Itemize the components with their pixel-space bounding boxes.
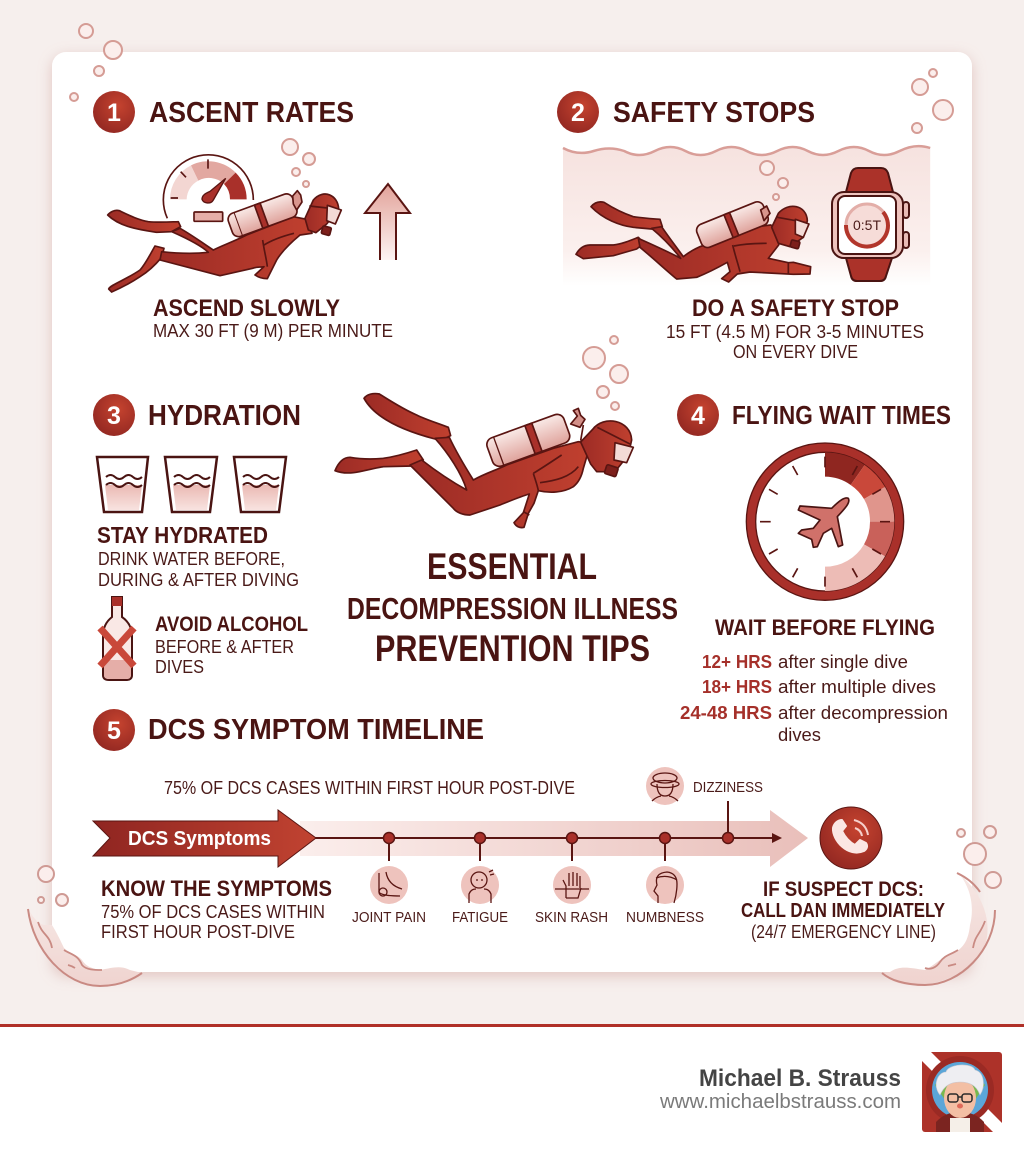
icon: diver ascending	[108, 191, 341, 292]
icon: water glasses	[97, 457, 286, 512]
label: dizziness: DIZZINESS	[693, 780, 763, 796]
panel: flying wait times	[677, 394, 951, 745]
icon: central diver	[335, 394, 633, 528]
text: cases within: 75% OF DCS CASES WITHIN	[101, 902, 325, 922]
text: if suspect dcs: IF SUSPECT DCS:	[763, 878, 924, 901]
bubbles: top left	[70, 24, 122, 101]
text: emergency line: (24/7 EMERGENCY LINE)	[751, 922, 936, 942]
icon: phone	[820, 807, 882, 869]
symptom: fatigue	[452, 866, 508, 926]
icon: dive watch	[832, 168, 909, 281]
icon: ascent speedometer	[163, 155, 253, 221]
text: safety stop depth: 15 FT (4.5 M) FOR 3-5 MINUTES	[666, 321, 924, 342]
footer rule	[0, 1024, 1024, 1027]
wait time: decompression dives	[680, 703, 948, 745]
main card	[52, 52, 972, 972]
author name: Michael B. Strauss	[699, 1065, 901, 1092]
symptom: joint pain	[352, 866, 426, 926]
wait time: single dive: after single dive	[778, 652, 908, 672]
icon: diver at safety stop	[576, 200, 811, 282]
water band	[563, 146, 930, 286]
panel: safety stops	[557, 91, 930, 362]
heading: dcs symptom timeline: DCS SYMPTOM TIMELINE	[148, 714, 484, 746]
text: know the symptoms: KNOW THE SYMPTOMS	[101, 876, 332, 901]
symptom: skin rash: SKIN RASH	[535, 909, 608, 926]
text: before and after: BEFORE & AFTER	[155, 637, 294, 657]
text: ascend slowly: ASCEND SLOWLY	[153, 295, 340, 322]
panel: ascent rates	[93, 91, 410, 341]
number badge 3	[93, 394, 135, 436]
wait time: decompression dives: after decompression	[778, 703, 948, 723]
text: dives: DIVES	[155, 657, 204, 677]
text: stay hydrated: STAY HYDRATED	[97, 522, 268, 548]
icon: dizziness	[646, 767, 684, 805]
bubbles above central diver	[583, 336, 628, 410]
icon: dive watch: 0:5T	[853, 217, 881, 233]
wait time: single dive	[702, 652, 908, 672]
symptom: numbness	[626, 866, 704, 926]
heading: ascent rates: ASCENT RATES	[149, 97, 354, 129]
number badge 5: 5	[107, 717, 121, 745]
wait time: multiple dives	[702, 677, 936, 697]
icon: up arrow	[365, 184, 410, 260]
dcs symptoms red arrow	[93, 810, 316, 867]
symptom: joint pain: JOINT PAIN	[352, 909, 426, 926]
panel: dcs symptom timeline	[93, 709, 946, 942]
bubbles near diver 2	[760, 161, 788, 200]
number badge 4	[677, 394, 719, 436]
heading: safety stops: SAFETY STOPS	[613, 97, 815, 129]
text: timeline caption: 75% OF DCS CASES WITHIN FIRST HOUR POST-DIVE	[164, 778, 575, 798]
panel: hydration	[93, 394, 308, 680]
dcs symptoms red arrow: DCS Symptoms	[128, 828, 271, 850]
number badge 2: 2	[571, 99, 585, 127]
text: wait before flying: WAIT BEFORE FLYING	[715, 615, 935, 640]
title line: prevention tips: PREVENTION TIPS	[375, 628, 650, 669]
footer	[659, 1052, 1002, 1132]
text: call dan: CALL DAN IMMEDIATELY	[741, 900, 946, 922]
text: on every dive: ON EVERY DIVE	[733, 341, 858, 362]
number badge 1: 1	[107, 99, 121, 127]
symptom: numbness: NUMBNESS	[626, 909, 704, 926]
water splash: bottom right	[882, 826, 1001, 985]
text: max rate: MAX 30 FT (9 M) PER MINUTE	[153, 320, 393, 341]
logo: portrait badge	[922, 1052, 1002, 1132]
text: do a safety stop: DO A SAFETY STOP	[692, 295, 899, 322]
number badge 3: 3	[107, 402, 121, 430]
number badge 2	[557, 91, 599, 133]
heading: hydration: HYDRATION	[148, 400, 301, 432]
water splash: bottom left	[28, 866, 142, 986]
wait time: multiple dives: after multiple dives	[778, 677, 936, 697]
title line: decompression illness: DECOMPRESSION ILLNESS	[347, 591, 678, 626]
wait time: decompression dives: 24-48 HRS	[680, 703, 772, 723]
title line: essential: ESSENTIAL	[427, 546, 597, 587]
wait time: decompression dives: dives	[778, 725, 821, 745]
number badge 5	[93, 709, 135, 751]
symptom: fatigue: FATIGUE	[452, 909, 508, 926]
text: during and after: DURING & AFTER DIVING	[98, 570, 299, 590]
wait time: single dive: 12+ HRS	[702, 652, 772, 672]
number badge 4: 4	[691, 402, 705, 430]
wait time: multiple dives: 18+ HRS	[702, 677, 772, 697]
main title	[347, 546, 678, 669]
symptom: skin rash	[535, 866, 608, 926]
bubbles: top right	[912, 69, 953, 133]
timeline arrow band	[300, 810, 808, 867]
bubbles near diver 1	[282, 139, 315, 187]
text: drink water: DRINK WATER BEFORE,	[98, 549, 285, 569]
text: avoid alcohol: AVOID ALCOHOL	[155, 613, 308, 636]
heading: flying wait times: FLYING WAIT TIMES	[732, 400, 951, 430]
icon: clock with plane	[746, 443, 904, 600]
icon: crossed out bottle	[100, 597, 134, 680]
central diver illustration	[335, 336, 633, 528]
author website: www.michaelbstrauss.com	[659, 1091, 901, 1113]
text: first hour: FIRST HOUR POST-DIVE	[101, 922, 295, 942]
timeline line and nodes	[315, 801, 782, 861]
number badge 1	[93, 91, 135, 133]
